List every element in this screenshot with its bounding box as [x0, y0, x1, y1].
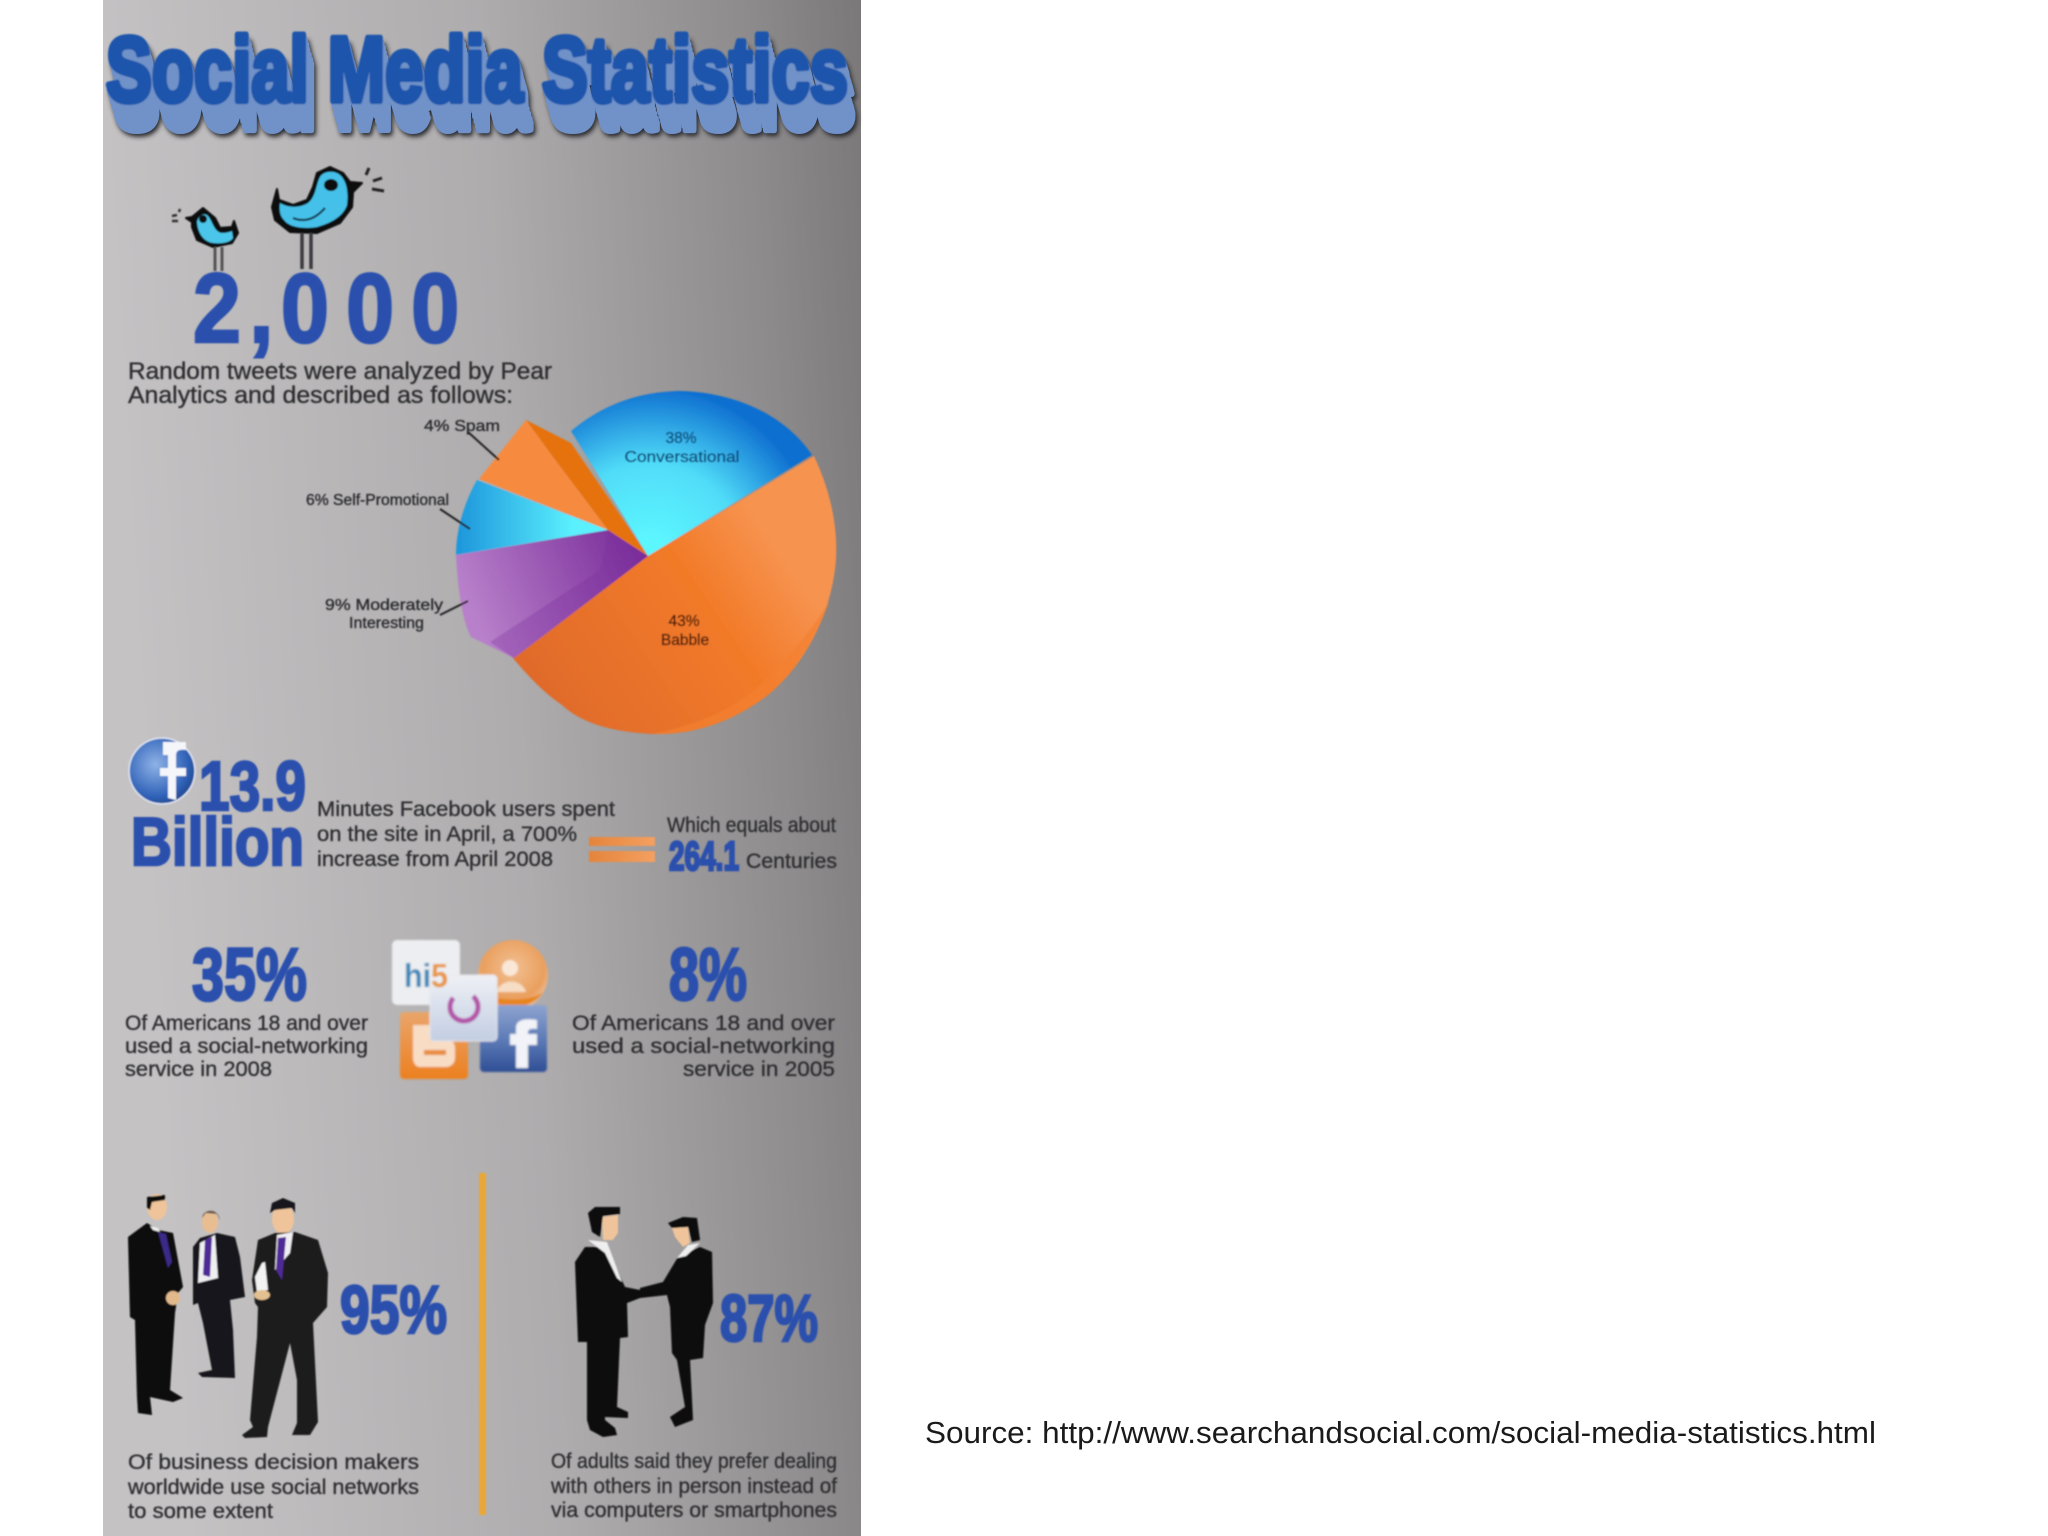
icon: hi5 tile — [392, 940, 460, 1005]
label: 9% moderately interesting — [325, 597, 468, 632]
text: facebook minutes description: Minutes Facebook users spent — [317, 798, 615, 821]
big number: 87%: 87% — [720, 1281, 818, 1355]
big label: Billion: Billion — [131, 804, 304, 880]
pie slice: spam dark side — [526, 420, 648, 556]
label: 4% spam — [424, 418, 500, 460]
label: 38% conversational — [624, 430, 740, 466]
pie shade: babble lower rim — [652, 600, 830, 734]
text: 2008 usage: service in 2008 — [125, 1057, 272, 1081]
text: tweets description: Analytics and described as follows: — [128, 382, 513, 409]
text: 2005 usage — [572, 1011, 835, 1081]
label: 6% self-promotional — [306, 492, 470, 529]
icon: orange community circle — [478, 940, 548, 1010]
text: adults preference: via computers or smartphones — [551, 1498, 837, 1522]
icons: social network logos — [392, 940, 548, 1079]
big number: 264.1: 264.1 — [669, 833, 739, 879]
pie slice: conversational 38% — [571, 391, 812, 556]
label: 9% moderately interesting: Interesting — [349, 615, 424, 632]
pie slice: moderately interesting 9% — [456, 530, 648, 658]
big number: 13.9: 13.9 — [199, 747, 306, 825]
section: tweets analysis — [128, 167, 836, 734]
section: adults prefer in person — [550, 1207, 837, 1522]
illustration: three businessmen — [128, 1194, 328, 1438]
text: business decision makers: worldwide use social networks — [127, 1475, 419, 1499]
icon: large twitter bird — [272, 167, 384, 269]
icon: facebook tile — [480, 1005, 547, 1072]
text: facebook minutes description — [317, 798, 615, 871]
icon: facebook globe — [129, 738, 195, 804]
text: adults preference: Of adults said they prefer dealing — [551, 1449, 837, 1473]
text: business decision makers: Of business decision makers — [128, 1450, 419, 1474]
text: centuries: Centuries — [746, 850, 837, 873]
figure: left businessman — [128, 1194, 183, 1415]
label: 4% spam: 4% Spam — [424, 418, 500, 435]
big number: 2,000: 2 — [193, 253, 241, 363]
label: 43% babble: 43% — [668, 613, 700, 630]
text: 2008 usage: used a social-networking — [125, 1034, 368, 1058]
figure: middle businessman — [193, 1211, 245, 1378]
pie shade: moderately interesting dark wedge — [490, 530, 648, 658]
icon: center ring tile — [430, 975, 497, 1041]
text: tweets description — [128, 358, 552, 409]
text: facebook minutes description: on the site in April, a 700% — [317, 823, 577, 846]
text: adults preference: with others in person instead of — [550, 1474, 837, 1498]
icon: hi5 lettering: hi5 — [404, 957, 448, 994]
label: 9% moderately interesting: 9% Moderately — [325, 597, 443, 614]
big number: 8%: 8% — [669, 933, 747, 1016]
big number: 2,000: 0 — [346, 253, 394, 363]
text: 2005 usage: used a social-networking — [572, 1034, 835, 1058]
icon: orange equals sign — [589, 837, 655, 862]
big number: 2,000: , — [249, 253, 273, 363]
big number: 95%: 95% — [340, 1272, 447, 1348]
figure: right businessman — [242, 1198, 328, 1438]
label: 43% babble: Babble — [661, 632, 709, 649]
text: 2005 usage: Of Americans 18 and over — [572, 1011, 835, 1035]
text: business decision makers — [127, 1450, 419, 1523]
text: 2008 usage: Of Americans 18 and over — [125, 1011, 368, 1035]
pie chart: tweet categories — [456, 391, 836, 734]
text: 2008 usage — [125, 1011, 368, 1081]
label: 38% conversational: Conversational — [624, 449, 740, 466]
illustration: businessman and businesswoman shaking hands — [575, 1207, 713, 1437]
big number: 35%: 35% — [192, 933, 307, 1016]
icon: small twitter bird — [172, 208, 238, 271]
pie slice: babble 43% — [512, 456, 836, 734]
big number: 2,000: 0 — [281, 253, 329, 363]
text: business decision makers: to some extent — [128, 1499, 273, 1523]
label: 43% babble — [661, 613, 709, 649]
title: Social Media Statistics — [106, 19, 848, 121]
label: 38% conversational: 38% — [665, 430, 697, 447]
text: facebook minutes description: increase from April 2008 — [317, 848, 553, 871]
text: adults preference — [550, 1449, 837, 1522]
icon: blogger tile — [400, 1012, 468, 1079]
section: business decision makers — [127, 1173, 486, 1523]
section: facebook minutes — [129, 738, 837, 880]
text: tweets description: Random tweets were analyzed by Pear — [128, 358, 552, 385]
figure: woman — [640, 1217, 713, 1427]
pie slice: self-promotional 6% — [456, 480, 608, 555]
divider: orange vertical line — [479, 1173, 486, 1515]
text: which equals about: Which equals about — [667, 814, 836, 837]
big number: 2,000: 0 — [411, 253, 459, 363]
figure: man — [575, 1207, 640, 1437]
pie slice: spam 4% — [479, 420, 608, 530]
text: 2005 usage: service in 2005 — [683, 1057, 835, 1081]
source citation: Source: http://www.searchandsocial.com/social-media-statistics.html — [925, 1415, 1876, 1450]
label: 6% self-promotional: 6% Self-Promotional — [306, 492, 449, 509]
panel: gray infographic background — [103, 0, 861, 1536]
section: americans using social networks — [125, 933, 835, 1081]
